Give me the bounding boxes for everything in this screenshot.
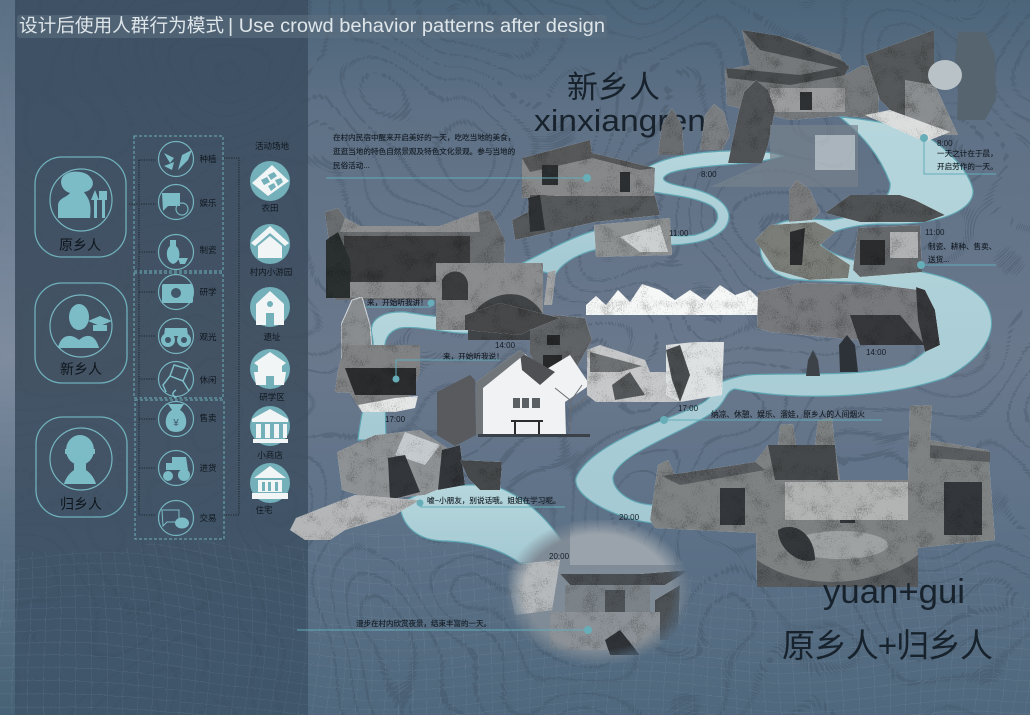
activity: 种植: 种植 [199, 154, 217, 164]
callout: morning of visitors: 民俗活动... [333, 160, 370, 170]
callout: 8:00 farmers: 一天之计在于晨， [937, 148, 998, 158]
callout: 8:00 farmers: 开启劳作的一天。 [937, 161, 998, 171]
heading: 原乡人+归乡人: 原乡人+归乡人 [782, 627, 993, 664]
photo: tilted window wall [666, 342, 724, 402]
venue: 遗址: 遗址 [263, 332, 281, 342]
left edge strip [0, 0, 15, 715]
photo: stone gate [436, 263, 556, 340]
activity: 研学 [158, 274, 217, 310]
persona card: 新乡人: 新乡人 [60, 361, 102, 377]
callout: evening leisure [660, 409, 882, 424]
photo: old truck [465, 303, 560, 335]
callout: morning of visitors [326, 132, 591, 182]
venue: 研学区: 研学区 [259, 392, 285, 402]
ribbon path: afternoon, lower west [358, 312, 475, 440]
venue: 村内小游园 [250, 224, 292, 277]
venue: 小商店: 小商店 [257, 450, 283, 460]
title: | Use crowd behavior patterns after design [228, 16, 605, 37]
time labels: 14:00 [495, 341, 516, 350]
activity: 售卖: 售卖 [199, 413, 217, 423]
persona card: 原乡人 [35, 157, 126, 257]
persona card: 新乡人 [35, 283, 127, 383]
time labels: 20:00 [619, 513, 640, 522]
photo: small courtyard, right [587, 345, 680, 402]
dotted connector lines [129, 158, 239, 515]
venue: 研学区 [250, 349, 290, 402]
time labels: 14:00 [866, 348, 887, 357]
time labels: 17:00 [385, 415, 406, 424]
callout: 11:00 farmers: 制瓷、耕种、售卖、 [928, 241, 996, 251]
callout: morning of visitors: 在村内民宿中醒来开启美好的一天，吃吃当地的美食， [333, 132, 515, 142]
time labels: 8:00 [701, 170, 717, 179]
activity: 休闲 [158, 362, 217, 398]
heading: yuan+gui: yuan+gui [823, 573, 965, 611]
callout: 11:00 farmers: 送货... [928, 254, 950, 264]
photo: pale modern pavilion [710, 125, 858, 187]
heading: 新乡人 xinxiangren: xinxiangren [534, 103, 706, 138]
activity: 售卖: ¥ [172, 418, 179, 429]
callout: children quiet [416, 495, 565, 507]
heading: 新乡人 xinxiangren [534, 70, 706, 138]
venue: 农田 [250, 161, 290, 213]
activity: 交易 [158, 500, 217, 536]
activity: 研学: 研学 [199, 287, 217, 297]
photo: brick farmhouse centre top [522, 140, 655, 198]
callout: 8:00 farmers: 8:00 [937, 139, 953, 148]
photo: exhibition house section [437, 350, 590, 446]
time labels [385, 170, 887, 561]
heading: 新乡人 xinxiangren: 新乡人 [567, 70, 660, 105]
activity: 娱乐: 娱乐 [199, 198, 217, 208]
activity venues column [250, 141, 292, 515]
bottom wire mesh [0, 530, 1030, 715]
photo: main hall, upper left [325, 208, 505, 300]
persona card: 归乡人: 归乡人 [60, 496, 102, 512]
venue: 住宅 [250, 463, 290, 515]
venue: 村内小游园: 村内小游园 [250, 267, 292, 277]
photo: hikers and crops [512, 195, 660, 240]
persona card: 归乡人 [36, 417, 127, 517]
activity: 娱乐 [158, 184, 217, 220]
time labels: 11:00 [669, 229, 689, 238]
photo: villagers group [335, 345, 420, 412]
callout: 11:00 farmers [917, 228, 996, 269]
photo: potter with bowl [928, 32, 996, 120]
callout: morning of visitors: 逛逛当地的特色自然景观及特色文化景观。参与当地的 [333, 146, 516, 156]
callout: 11:00 farmers: 11:00 [925, 228, 945, 237]
activity: 制瓷 [158, 234, 217, 270]
photo: children studying [337, 430, 465, 500]
venues heading: 活动场地 [255, 141, 289, 151]
callout: 8:00 farmers [920, 134, 998, 174]
photo: stacked tiles and worker [865, 30, 958, 142]
callout: evening leisure: 纳凉、休憩、娱乐、溜娃，原乡人的人间烟火 [711, 409, 865, 419]
activity: 休闲: 休闲 [199, 375, 217, 385]
left dark panel [15, 0, 308, 715]
callout: evening stroll [297, 618, 592, 634]
photo: top village houses [725, 30, 880, 120]
callout: children quiet: 嘘~小朋友，别说话哦。姐姐在学习呢。 [427, 495, 561, 505]
photo: hikers in front of the gate [658, 80, 775, 163]
photo: electric tricycle [853, 225, 922, 277]
figures: walking elder and child [806, 335, 858, 376]
callout: evening stroll: 漫步在村内欣赏夜景，结束丰富的一天。 [356, 618, 491, 628]
ribbon path: morning to noon to evening, east side [576, 117, 992, 523]
photo: reed field [594, 218, 672, 257]
venue: 遗址 [250, 287, 290, 342]
photo: village panorama with porters [757, 283, 940, 352]
ribbon path: dusk, bottom [400, 485, 575, 563]
callout: listen talk: 来，开始听我讲！ [367, 297, 428, 307]
activity: 进货: 进货 [199, 463, 217, 473]
photo: brick tower [341, 297, 373, 360]
time labels: 17:00 [678, 404, 699, 413]
venue: 住宅: 住宅 [255, 505, 273, 515]
callout: listen to me [392, 351, 504, 382]
time labels: 20:00 [549, 552, 570, 561]
dashed group frames [134, 136, 224, 539]
callout: listen to me: 来，开始听我说！ [443, 351, 504, 361]
activity: 观光: 观光 [199, 332, 217, 342]
persona card: 原乡人: 原乡人 [59, 237, 101, 253]
photo: round evening scene [508, 520, 688, 663]
venue: 小商店 [250, 406, 290, 460]
ribbon path: midday, west side [518, 151, 783, 275]
activity: 种植 [158, 142, 217, 176]
venue: 农田: 农田 [261, 203, 279, 213]
activity: 制瓷: 制瓷 [199, 245, 217, 255]
activity: 售卖 [158, 402, 217, 436]
photo: farmer with hoe [755, 222, 850, 280]
photo: drying pottery row [290, 460, 502, 540]
activity: 交易: 交易 [199, 513, 217, 523]
photo: old courtyard houses, lower right [650, 405, 995, 587]
photo: tile pile and farmers [789, 180, 945, 222]
photo: white grass [586, 284, 765, 315]
title [17, 15, 607, 38]
activities column [158, 142, 217, 536]
activity: 观光 [158, 318, 217, 354]
title: 设计后使用人群行为模式 [19, 15, 224, 36]
photo: kiln ruin [530, 315, 592, 370]
activity: 进货 [158, 450, 217, 486]
